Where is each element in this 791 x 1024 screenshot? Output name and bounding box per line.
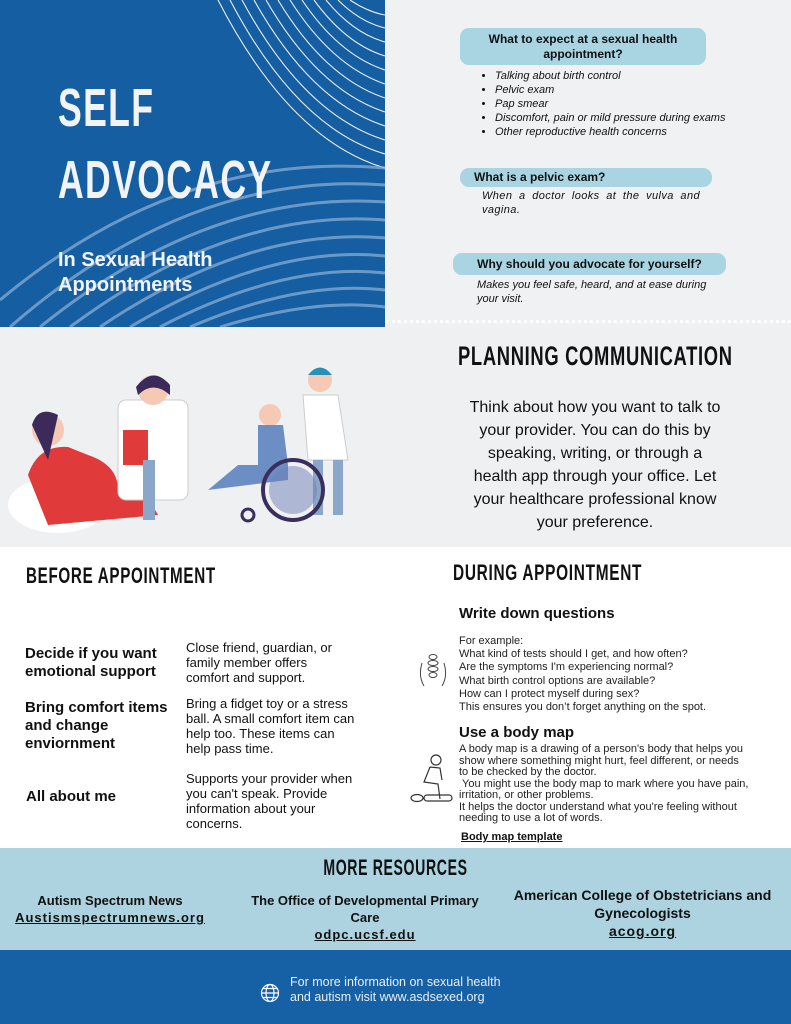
footer text [290, 975, 501, 1004]
pill: pelvic exam: What is a pelvic exam? [474, 170, 605, 184]
text: questions: How can I protect myself during sex? [459, 688, 639, 700]
text: Makes you feel safe, heard, and at ease during your visit. [477, 279, 706, 305]
resource 3: acog.org [609, 923, 676, 939]
text: body map: You might use the body map to mark where you have pain, irritation, or other problems. [459, 778, 748, 801]
text: questions: For example: [459, 635, 523, 647]
row: emotional support: Decide if you want [25, 645, 157, 662]
panel: planning communication [0, 327, 791, 547]
resource 2: The Office of Developmental Primary Care [251, 893, 479, 925]
row: emotional support: emotional support [25, 663, 156, 680]
list: Pap smear [495, 98, 548, 110]
row: comfort items [25, 699, 168, 752]
body text: your provider. You can do this by [479, 422, 711, 439]
footer [0, 950, 791, 1024]
row: all about me: All about me [26, 788, 116, 805]
list [482, 70, 726, 138]
resource 1 [15, 893, 205, 925]
text: questions: Are the symptoms I'm experiencing normal? [459, 661, 673, 673]
panel: title hero [0, 0, 385, 327]
icon: globe [260, 984, 280, 1002]
text: body map: It helps the doctor understand what you're feeling without needing to use a lot of words. [459, 800, 737, 824]
resource 2 [251, 893, 479, 942]
resource 3 [514, 887, 771, 939]
text: questions: What birth control options are available? [459, 675, 655, 687]
pill: why advocate: Why should you advocate for yourself? [477, 257, 702, 271]
title [58, 78, 273, 210]
body text: Think about how you want to talk to [470, 399, 720, 416]
panel: before appointment: Close friend, guardian, or family member offers comfort and support. [186, 640, 332, 685]
body text: your preference. [537, 514, 653, 531]
list: Talking about birth control [495, 70, 621, 82]
title: ADVOCACY [58, 150, 273, 210]
text: body map: A body map is a drawing of a person's body that helps you show where something might hurt, feel different, or needs to be checked by the doctor. [459, 743, 743, 778]
text: questions: This ensures you don’t forget anything on the spot. [459, 701, 706, 713]
heading: MORE RESOURCES [323, 855, 468, 880]
resource 2: odpc.ucsf.edu [314, 927, 416, 942]
body text: speaking, writing, or through a [488, 445, 702, 462]
heading: DURING APPOINTMENT [453, 560, 642, 585]
pill: what to expect: What to expect at a sexual health [489, 32, 677, 46]
footer text: For more information on sexual health [290, 975, 501, 989]
panel: expectations [385, 0, 791, 327]
footer text: and autism visit www.asdsexed.org [290, 990, 485, 1004]
panel: before appointment: Supports your provider when you can't speak. Provide information about your concerns. [186, 771, 352, 831]
pill: why advocate [453, 253, 726, 275]
subheading: Write down questions [459, 605, 615, 622]
pill: pelvic exam [460, 168, 712, 187]
body text: your healthcare professional know [474, 491, 716, 508]
list: Pelvic exam [495, 84, 554, 96]
body text: health app through your office. Let [474, 468, 716, 485]
title: SELF [58, 78, 154, 138]
row: comfort items: enviornment [25, 735, 115, 752]
resource 1: Autism Spectrum News [37, 893, 183, 908]
pill: what to expect [460, 28, 706, 65]
illustration: patients and doctors [8, 368, 348, 533]
panel: before appointment: Bring a fidget toy or a stress ball. A small comfort item can help too. These items can help pass time. [186, 696, 354, 756]
resource 1: Austismspectrumnews.org [15, 910, 205, 925]
subtitle: In Sexual Health [58, 249, 212, 271]
subheading: Use a body map [459, 724, 574, 741]
body text [470, 399, 720, 531]
text: When a doctor looks at the vulva and vagina. [482, 190, 700, 216]
icon: body map [410, 754, 453, 802]
link: body map template: Body map template [461, 831, 562, 843]
heading: BEFORE APPOINTMENT [26, 563, 216, 588]
panel: before appointment [25, 563, 354, 831]
text: body map [459, 743, 748, 824]
text: questions: What kind of tests should I get, and how often? [459, 648, 688, 660]
row: emotional support [25, 645, 157, 680]
resource 3: American College of Obstetricians and Gynecologists [514, 887, 771, 921]
row: comfort items: Bring comfort items [25, 699, 168, 716]
subtitle [58, 249, 212, 296]
list: Discomfort, pain or mild pressure during exams [495, 112, 725, 124]
heading: PLANNING COMMUNICATION [458, 341, 733, 371]
text: questions [459, 635, 706, 713]
row: comfort items: and change [25, 717, 108, 734]
pill: what to expect: appointment? [543, 47, 623, 61]
list: Other reproductive health concerns [495, 126, 667, 138]
subtitle: Appointments [58, 274, 192, 296]
icon: hands spine [420, 654, 446, 686]
panel: more resources [0, 848, 791, 950]
panel: during appointment [410, 560, 748, 843]
